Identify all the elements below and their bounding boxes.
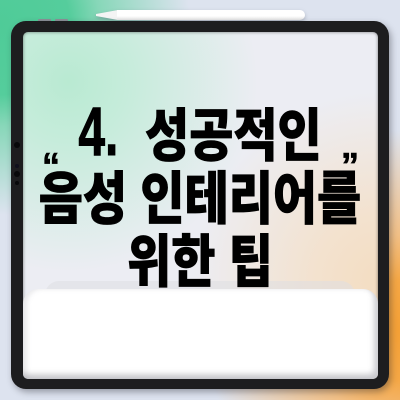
title line 3: 위한 팁: [127, 232, 273, 295]
volume button one: [38, 19, 51, 22]
tablet screen: [23, 32, 378, 379]
volume button two: [55, 19, 68, 22]
title line 1: 4.: [78, 94, 118, 171]
camera lens lower: [15, 181, 19, 185]
white panel: [23, 289, 378, 379]
camera lens large: [14, 142, 20, 148]
back card behind panel: [45, 281, 355, 321]
opening quotation mark: “: [42, 145, 60, 186]
title line 1: 성공적인: [145, 106, 322, 169]
camera lens medium: [14, 171, 20, 177]
title line 1: [78, 94, 322, 171]
stylus tip: [96, 10, 118, 20]
title line 2: 음성 인테리어를: [39, 169, 361, 232]
closing quotation mark: ”: [341, 145, 359, 186]
camera dots: [14, 142, 20, 185]
camera lens small: [15, 164, 19, 168]
icon: tablet side buttons: [38, 19, 68, 21]
stylus body: [117, 10, 305, 20]
title text: [39, 94, 361, 295]
icon: stylus pencil: [96, 10, 307, 21]
